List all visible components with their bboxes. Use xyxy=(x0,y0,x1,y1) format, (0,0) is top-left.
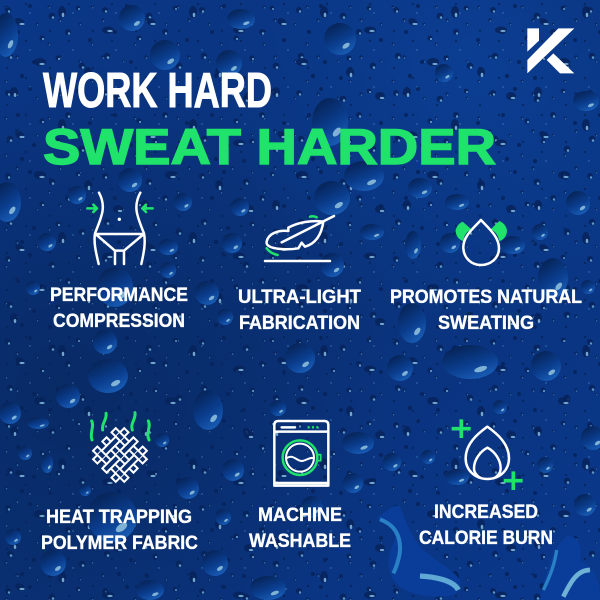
panel: performance compression xyxy=(50,193,188,332)
logo: K mark xyxy=(527,28,574,73)
label: compression: COMPRESSION xyxy=(53,311,185,332)
label: performance: PERFORMANCE xyxy=(50,285,188,306)
label: heat trapping: HEAT TRAPPING xyxy=(46,507,192,528)
label: calorie burn: CALORIE BURN xyxy=(419,528,553,549)
icon: sweat drop with green leaves xyxy=(456,220,507,265)
icon: washing machine xyxy=(274,421,328,486)
icon: flame with plus signs xyxy=(452,419,523,490)
label: increased: INCREASED xyxy=(434,502,538,523)
label: ultra-light: ULTRA-LIGHT xyxy=(238,287,361,308)
icon: feather xyxy=(265,216,334,261)
panel: increased calorie burn xyxy=(419,419,553,549)
title: sweat harder: SWEAT HARDER xyxy=(43,119,496,175)
icon: waist with arrows xyxy=(87,193,153,264)
title: work hard: WORK HARD xyxy=(43,64,272,118)
panel: ultra-light fabrication xyxy=(238,216,361,334)
label: promotes natural: PROMOTES NATURAL xyxy=(390,287,582,308)
label: fabrication: FABRICATION xyxy=(239,313,360,334)
label: polymer fabric: POLYMER FABRIC xyxy=(41,533,198,554)
panel: heat trapping polymer fabric xyxy=(41,413,198,554)
panel: promotes natural sweating xyxy=(390,220,582,334)
panel: machine washable xyxy=(249,421,351,552)
label: sweating: SWEATING xyxy=(438,313,534,334)
label: washable: WASHABLE xyxy=(249,531,351,552)
icon: woven fabric with steam xyxy=(89,413,151,486)
label: machine: MACHINE xyxy=(258,505,342,526)
